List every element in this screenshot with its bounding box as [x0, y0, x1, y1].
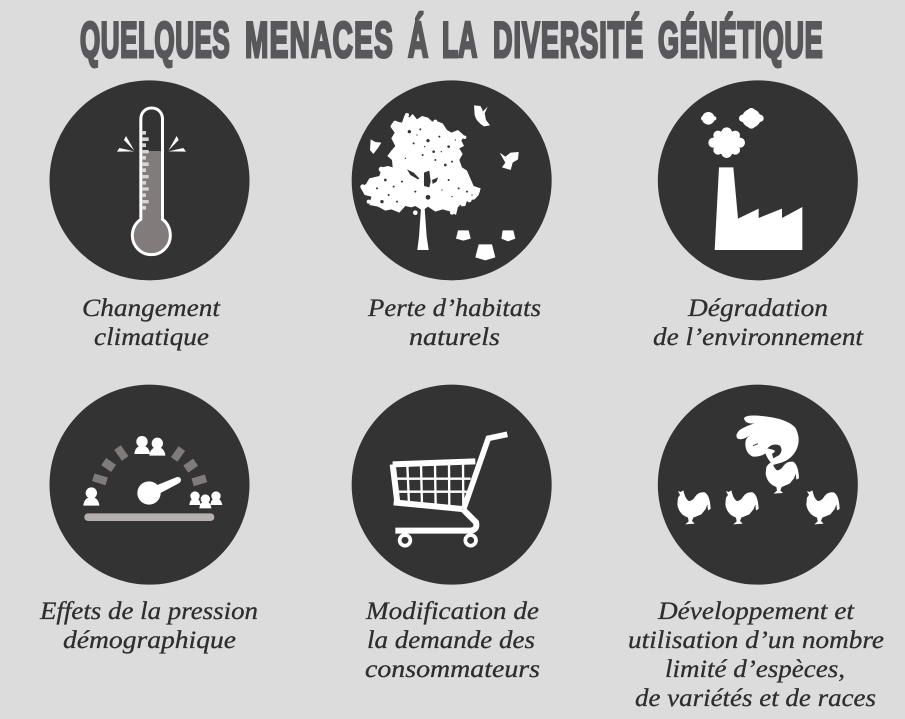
caption: demande des consommateurs — [365, 598, 540, 683]
caption: perte d'habitats — [367, 295, 541, 351]
caption: nombre limité d'espèces: de variétés et de races — [635, 685, 876, 712]
panel: perte d'habitats — [352, 80, 552, 351]
title: Á — [408, 11, 428, 68]
caption: dégradation de l'environnement — [653, 295, 864, 351]
panel: demande des consommateurs — [352, 385, 552, 683]
caption: pression démographique — [39, 598, 258, 654]
title: QUELQUES — [80, 13, 230, 68]
title: MENACES — [245, 11, 393, 68]
caption: demande des consommateurs: consommateurs — [365, 656, 540, 683]
panel: changement climatique — [50, 80, 249, 351]
caption: perte d'habitats: Perte d’habitats — [367, 295, 541, 322]
caption: demande des consommateurs: Modification de — [365, 598, 539, 625]
caption: nombre limité d'espèces: utilisation d’un nombre — [628, 627, 884, 654]
icon: shopping cart — [352, 385, 552, 585]
title: LA — [442, 13, 477, 68]
caption: pression démographique: Effets de la pression — [39, 598, 258, 625]
panel: pression démographique — [39, 385, 258, 654]
caption: pression démographique: démographique — [63, 627, 236, 654]
title: GÉNÉTIQUE — [658, 11, 823, 68]
caption: dégradation de l'environnement: de l’environnement — [653, 324, 864, 351]
caption: dégradation de l'environnement: Dégradation — [687, 295, 828, 322]
caption: perte d'habitats: naturels — [409, 324, 500, 351]
caption: nombre limité d'espèces — [628, 598, 884, 712]
caption: changement climatique: climatique — [94, 324, 209, 351]
icon: factory with smoke — [658, 80, 858, 280]
caption: changement climatique: Changement — [82, 295, 221, 322]
title — [80, 11, 823, 68]
icon: tree, birds and stumps — [352, 80, 552, 280]
panel: nombre limité d'espèces — [628, 385, 884, 712]
icon: population gauge — [50, 385, 249, 585]
caption: demande des consommateurs: la demande des — [367, 627, 535, 654]
icon: thermometer — [50, 80, 249, 280]
caption: nombre limité d'espèces: limité d’espèces, — [665, 656, 845, 683]
caption: nombre limité d'espèces: Développement et — [657, 598, 855, 625]
icon: hand selecting rooster — [658, 385, 858, 585]
caption: changement climatique — [82, 295, 221, 351]
title: DIVERSITÉ — [493, 11, 643, 68]
panel: dégradation de l'environnement — [653, 80, 864, 351]
